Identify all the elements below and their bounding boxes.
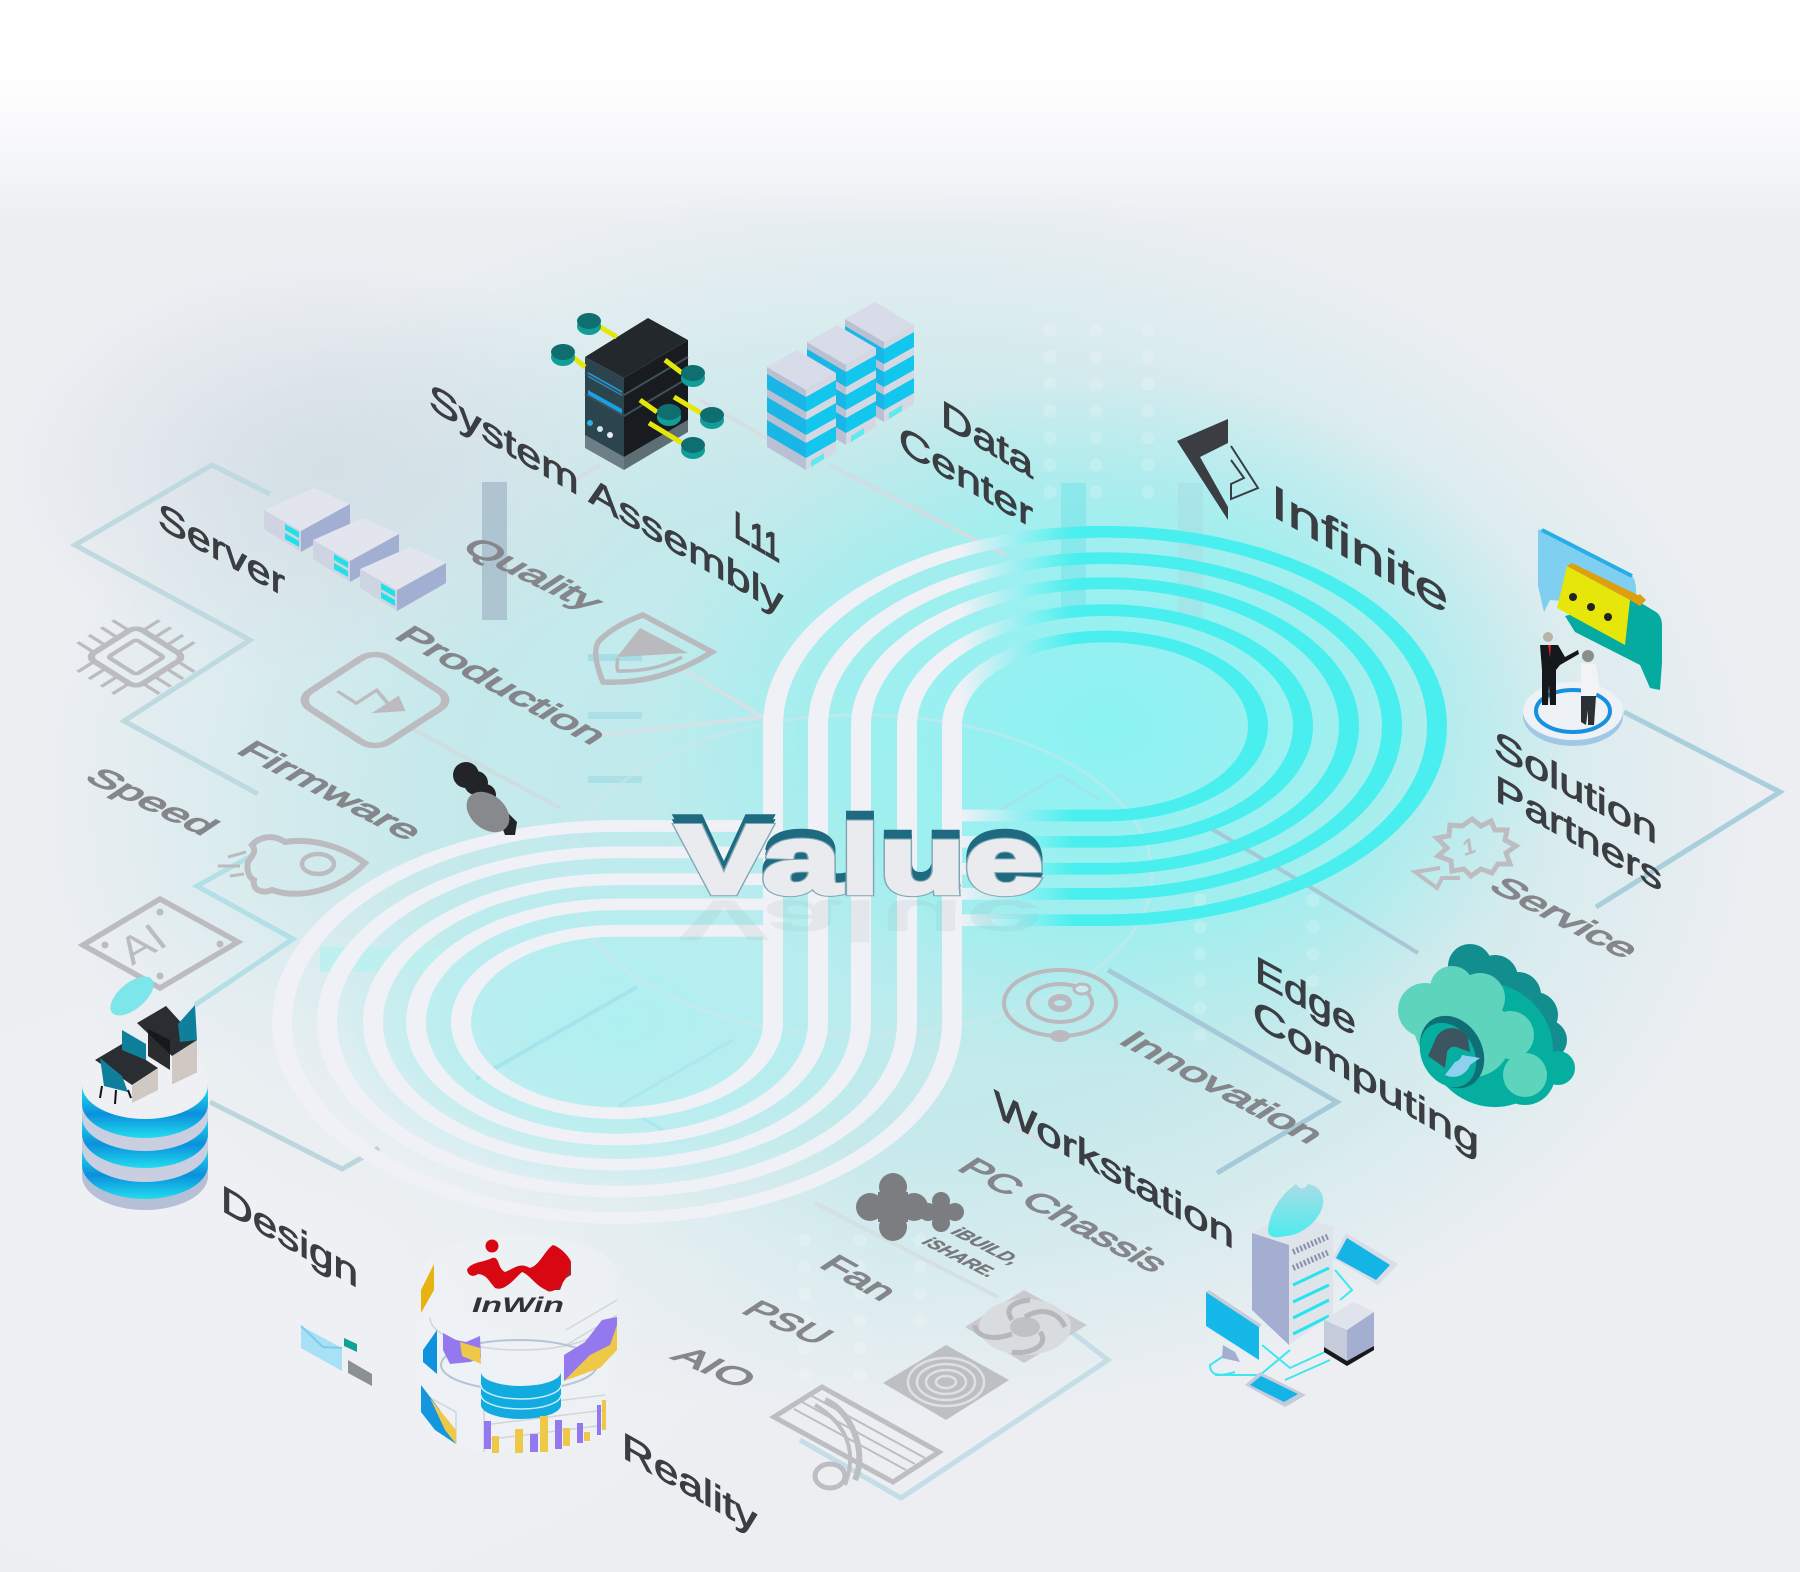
cylinder body: [421, 1235, 617, 1455]
platform disc: [1523, 682, 1623, 746]
yellow arrows: [573, 327, 701, 443]
icon: solution partners: [1523, 529, 1662, 746]
label: Design: Design: [221, 1178, 358, 1296]
chat bubbles: [1538, 529, 1662, 690]
label: Center: Center: [899, 418, 1033, 537]
label: Innovation: Innovation: [1111, 1026, 1333, 1149]
server tower box: [585, 318, 688, 470]
icon: production chart: [297, 649, 453, 751]
icon: server boxes: [264, 488, 446, 611]
cloud front: [1394, 963, 1547, 1097]
title extrusion: Value: [677, 796, 1043, 905]
icon: mail envelopes: [301, 1326, 372, 1386]
small server: [1324, 1302, 1374, 1366]
icon: fan: [965, 1290, 1087, 1363]
title: Value: [677, 796, 1043, 953]
cylinder tiers: [82, 1042, 208, 1210]
desks and chairs: [95, 1005, 197, 1104]
label: Solution: Solution: [1494, 722, 1657, 853]
icon: speed rocket: [218, 837, 365, 894]
monitor: [1206, 1290, 1262, 1362]
label: Computing: Computing: [1253, 992, 1479, 1165]
icon: data center racks: [767, 302, 914, 470]
label: L11: L11: [734, 504, 780, 571]
data dot columns: [805, 330, 1313, 1380]
vertical light bars: [320, 482, 1203, 972]
labels: floor captions: [77, 533, 1649, 1393]
title extrusion: Value: [677, 801, 1043, 910]
label: Quality: Quality: [454, 533, 612, 616]
title face: Value: [677, 805, 1043, 914]
label: System Assembly: System Assembly: [429, 376, 783, 624]
icon: AI chip card: [83, 899, 238, 988]
label: Data: Data: [941, 393, 1034, 488]
icon: quality shield: [596, 615, 712, 682]
icon: edge computing cloud: [1394, 944, 1578, 1133]
brand text iBUILD: iBUILD,: [947, 1224, 1026, 1267]
label: PC Chassis: PC Chassis: [950, 1153, 1177, 1278]
cloud: [1268, 1184, 1323, 1237]
label: Infinite: Infinite: [1271, 474, 1448, 625]
label: Service: Service: [1481, 872, 1649, 964]
back cloud: [1448, 944, 1567, 1060]
sync gear: [1407, 1004, 1497, 1100]
cables: [1210, 1270, 1352, 1380]
cloud side: [1402, 957, 1578, 1133]
infinity symbol: [282, 532, 1437, 1218]
icon: workstation network: [1206, 1184, 1398, 1407]
label: Speed: Speed: [77, 763, 227, 840]
label: Partners: Partners: [1495, 767, 1662, 900]
label: Production: Production: [387, 621, 616, 750]
label: Workstation: Workstation: [994, 1082, 1234, 1258]
brand text iSHARE: iSHARE.: [918, 1234, 1002, 1280]
icon: InWin reality cylinder: [421, 1235, 617, 1455]
label: Firmware: Firmware: [229, 736, 432, 846]
icon: Infinite logo: [1177, 419, 1258, 520]
label: AIO: AIO: [664, 1342, 765, 1393]
server tower: [1252, 1213, 1333, 1345]
icon: design desk cylinder: [82, 969, 208, 1210]
cylinder panels: [421, 1264, 617, 1444]
partner figure: [1581, 650, 1600, 725]
title reflection: Value: [677, 888, 1043, 953]
label: Fan: Fan: [812, 1250, 906, 1306]
icon: chip: [54, 605, 218, 709]
small cloud: [104, 969, 160, 1023]
data discs: [551, 313, 724, 459]
icon: black cloud: [453, 762, 517, 840]
label: Server: Server: [158, 494, 285, 605]
icon: innovation atom: [1004, 970, 1116, 1042]
icon: service badge: [1415, 819, 1516, 888]
icon: AIO cooler: [774, 1387, 939, 1488]
circuit lines: [75, 400, 1780, 1498]
labels: dark captions: [158, 376, 1662, 1542]
title extrusion: [677, 796, 1043, 910]
icon: system assembly server: [551, 313, 724, 470]
icon: iBuild iShare puzzle gears: [856, 1173, 1026, 1280]
brand text: InWin: [472, 1294, 564, 1317]
phone: [1245, 1372, 1306, 1407]
logo mark: [467, 1240, 571, 1291]
icon: PSU: [883, 1345, 1009, 1420]
icon: service badge: 1: [1458, 833, 1479, 861]
tablet: [1333, 1233, 1398, 1285]
businessman: [1540, 632, 1579, 705]
label: Reality: Reality: [622, 1425, 757, 1542]
icon: AI chip card: AI: [110, 916, 176, 973]
label: PSU: PSU: [734, 1296, 841, 1350]
title face outline: Value: [677, 805, 1043, 914]
label: Edge: Edge: [1255, 948, 1356, 1045]
bar chart: [484, 1400, 606, 1453]
